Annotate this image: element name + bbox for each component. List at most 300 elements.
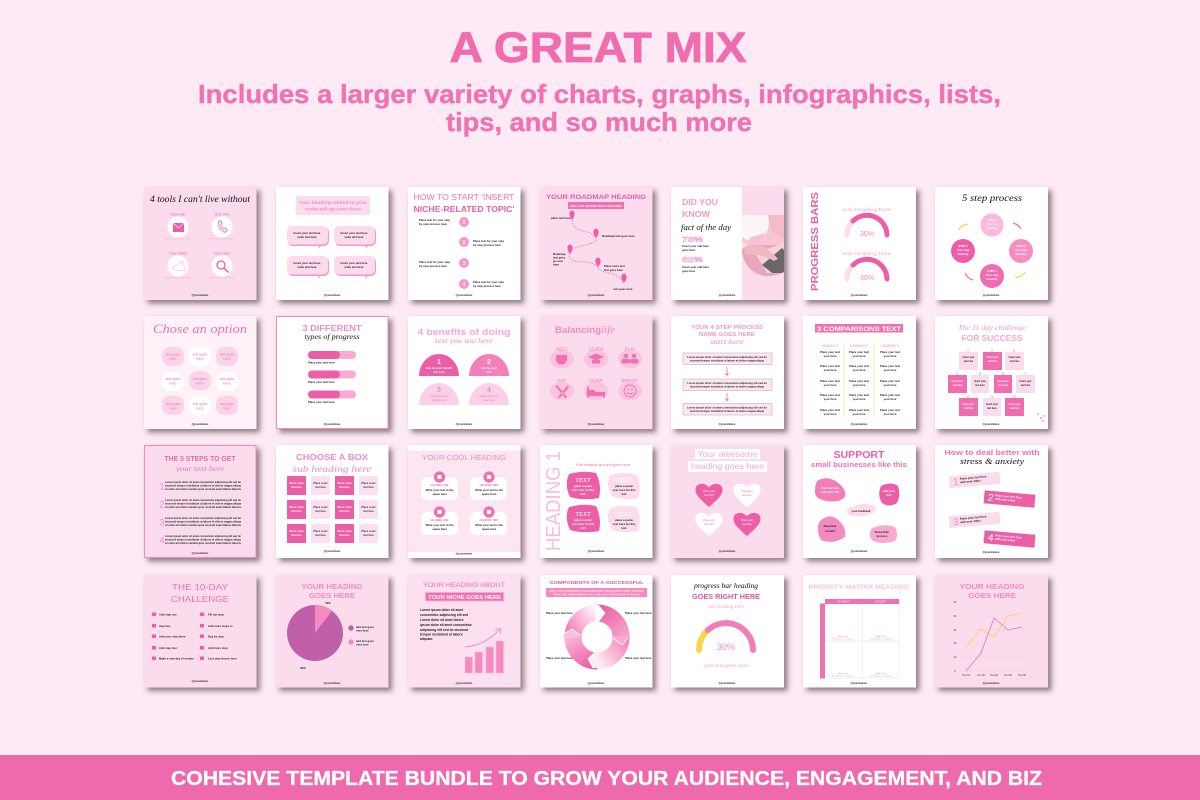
panel: roadmap: Place more text bbox=[604, 264, 625, 268]
process box 2 bbox=[683, 379, 772, 390]
panel: how to start: 2 bbox=[463, 240, 466, 246]
panel: 10-day challenge: Add your step three bbox=[159, 634, 186, 638]
icons bbox=[556, 354, 638, 398]
panel: line chart: @yoursitehere bbox=[983, 682, 1000, 685]
panel: roadmap: Roadmap bbox=[553, 252, 566, 256]
panel: components ring: Place your text here bbox=[546, 656, 573, 660]
panel: heading 1: place a quote bbox=[574, 518, 592, 522]
panel: heading 1: TEXT bbox=[616, 477, 632, 484]
panel: 11 day challenge: 2 bbox=[991, 348, 994, 352]
panel: step process: heading bbox=[987, 277, 998, 281]
line chart: Text 02 bbox=[977, 674, 986, 677]
strip 2 bbox=[984, 490, 1035, 508]
panel: choose a box: Place some bbox=[337, 505, 352, 509]
comparison rows: Place your text bbox=[880, 364, 900, 368]
step text: ut enim ad minim veniam quis nostrud exercitation laboris bbox=[165, 505, 241, 509]
progress bar 3: Place your text here bbox=[308, 400, 335, 404]
arrows bbox=[959, 223, 1025, 280]
process box 1: Lorem ipsum dolor sit amet consectetur adipiscing elit sed do bbox=[687, 355, 767, 359]
panel: 4 benefits: 4 bbox=[487, 387, 491, 394]
matrix: MY RIGHT bbox=[837, 600, 850, 604]
panel: did you know: fact of the day bbox=[681, 223, 731, 232]
panel: progress bar heading: progress bar heading bbox=[693, 581, 758, 590]
panel: hearts: Place your bbox=[741, 490, 753, 493]
comparison rows: Place your text bbox=[880, 393, 900, 397]
step text: ut enim ad minim veniam quis nostrud exercitation laboris bbox=[165, 541, 241, 545]
strip 1: with your steps bbox=[959, 478, 981, 484]
gauge bbox=[699, 623, 753, 650]
strip 4: Place your text here bbox=[995, 533, 1022, 540]
comparison rows bbox=[820, 350, 900, 416]
process box 2: eiusmod tempor incididunt ut labore et dolore magna aliqua bbox=[690, 384, 764, 388]
icon: megaphone bbox=[168, 256, 188, 276]
panel: choose a box: Place some bbox=[289, 505, 304, 509]
panel: pie chart: 90% bbox=[300, 666, 306, 670]
ring diagram bbox=[573, 613, 621, 661]
decoration: dots bbox=[1037, 413, 1045, 422]
comparison rows: your here bbox=[824, 354, 837, 358]
comparison rows: your here bbox=[824, 412, 837, 416]
comparison rows: your here bbox=[884, 397, 897, 401]
panel: hearts bbox=[671, 445, 784, 558]
panel: how to start: HOW TO START 'INSERT bbox=[414, 193, 515, 202]
panel: heading 1: @yoursitehere bbox=[588, 550, 605, 553]
comparison rows: Place your text bbox=[820, 408, 840, 412]
panel: priority matrix: PRIORITY MATRIX HEADING bbox=[808, 585, 910, 591]
panel: how to start: 4 bbox=[463, 282, 466, 288]
panel: balancing life: REST bbox=[556, 346, 568, 352]
bubble 2: Insert your text here bbox=[341, 231, 368, 235]
comparison rows: Place your text bbox=[820, 379, 840, 383]
panel: choose a box: text here bbox=[291, 485, 302, 489]
panel: pie chart: @yoursitehere bbox=[324, 682, 341, 685]
blobs bbox=[567, 472, 640, 532]
panel: choose a box: text here bbox=[291, 509, 302, 513]
panel: 10-day challenge: @yoursitehere bbox=[192, 680, 209, 683]
panel: pie chart: GOES HERE bbox=[309, 591, 355, 600]
panel: 10-day challenge: Add more steps to bbox=[208, 624, 233, 628]
panel: balancing life: PLAY bbox=[625, 346, 635, 352]
comparison rows: Place your text bbox=[820, 393, 840, 397]
panel: 11 day challenge: Insert your bbox=[1009, 356, 1021, 359]
panel: choose a box: text here bbox=[315, 509, 326, 513]
step text: eiusmod tempor incididunt ut labore et dolore magna aliqua bbox=[165, 520, 241, 524]
panel: 10-day challenge: Add step four bbox=[159, 646, 178, 650]
panel: 4 benefits: text here your bbox=[430, 394, 448, 398]
panel: comparisons: @yoursitehere bbox=[851, 423, 868, 426]
panel: 10-day challenge: Last step lesson here bbox=[208, 656, 237, 660]
comparison rows: Place your text bbox=[820, 350, 840, 354]
panel: 5 steps: 4 bbox=[159, 536, 165, 546]
panel: how to start: NICHE-RELATED TOPIC' bbox=[414, 205, 515, 214]
panel: comparisons: HEADING 1 bbox=[821, 344, 839, 348]
panel: 5 steps: @yoursitehere bbox=[192, 552, 209, 555]
line chart: 40 bbox=[954, 629, 957, 632]
panel: step process: Your step bbox=[957, 248, 970, 252]
panel: components ring: ADD A LITTLE SUBHEADING TO DESCRIBE WHAT THIS DIAGRAM IS ABOUT AND THEN bbox=[550, 590, 644, 593]
process box 1: eiusmod tempor incididunt ut labore et dolore magna aliqua bbox=[690, 358, 764, 362]
panel: components ring: Place your text here bbox=[625, 656, 652, 660]
panel: heading 1: TEXT bbox=[616, 511, 632, 518]
panel: types of progress: @yoursitehere bbox=[324, 423, 341, 426]
panel: 11 day challenge: Insert your bbox=[952, 380, 964, 383]
panel: line chart: GOES HERE bbox=[968, 591, 1016, 600]
panel: hearts: text here bbox=[704, 523, 714, 526]
panel: 11 day challenge: 3 bbox=[1013, 348, 1016, 352]
strip 4: with your steps bbox=[994, 537, 1016, 543]
line chart: Text 04 bbox=[1004, 674, 1013, 677]
comparison rows: your here bbox=[824, 383, 837, 387]
panel: support: Know their bbox=[875, 530, 890, 534]
panel: 4 tools: write your text here bbox=[164, 276, 191, 280]
panel: cool heading: Write your text in the bbox=[426, 523, 454, 527]
panel: heading 1: text bbox=[622, 492, 627, 496]
panel: step process: Your step bbox=[986, 273, 999, 277]
comparison rows: your here bbox=[853, 383, 866, 387]
panel: heading 1: text bbox=[581, 492, 586, 496]
panel: support: process bbox=[877, 534, 888, 538]
comparison rows: Place your text bbox=[820, 364, 840, 368]
panel: step process: STEP 3 bbox=[987, 269, 997, 273]
panel: progress bar heading: @yoursitehere bbox=[719, 682, 736, 685]
panel: how to start: Place text for your step bbox=[473, 280, 504, 284]
panel: 5 steps: 1 bbox=[159, 482, 165, 492]
legend bbox=[348, 625, 374, 646]
strip 3: Place your text here bbox=[960, 514, 987, 521]
panel: 11 day challenge: Insert your bbox=[997, 380, 1009, 383]
pie chart bbox=[287, 605, 343, 661]
panel: roadmap: text goes bbox=[553, 256, 566, 260]
panel: choose a box: Place some bbox=[337, 481, 352, 485]
panel: comparisons: 3 COMPARISONS TEXT bbox=[817, 326, 901, 333]
panel: 4 tools: write your text here bbox=[164, 236, 191, 240]
panel: did you know: 78% bbox=[682, 235, 703, 244]
panel: did you know: goes here bbox=[682, 269, 696, 273]
blobs bbox=[815, 478, 899, 543]
panel: support: write here the bbox=[820, 490, 840, 494]
panel: cool heading: HEADING TWO bbox=[480, 518, 498, 522]
comparison rows: Place your text bbox=[849, 350, 869, 354]
option blobs bbox=[162, 347, 238, 415]
comparison rows: your here bbox=[853, 354, 866, 358]
panel: choose a box: Place some bbox=[361, 481, 376, 485]
panel: pie chart bbox=[276, 575, 388, 688]
panel: choose a box: Place some bbox=[313, 481, 328, 485]
arrow bbox=[726, 392, 728, 401]
panel: progress bars: PROGRESS BARS bbox=[810, 192, 821, 291]
panel: 11 day challenge: text here bbox=[988, 360, 998, 363]
panel: roadmap: go over bbox=[553, 259, 564, 263]
line chart bbox=[954, 601, 1030, 677]
panel: choose a box: text here bbox=[339, 509, 350, 513]
bubble 1: Insert your text here bbox=[294, 231, 321, 235]
panel: priority matrix bbox=[803, 575, 916, 688]
panel: did you know: goes here bbox=[682, 248, 696, 252]
line chart: 60 bbox=[954, 601, 957, 604]
panel: 4 tools: 4 tools I can't live without bbox=[150, 194, 251, 204]
panel: cool heading: @yoursitehere bbox=[456, 552, 473, 556]
panel: how to start bbox=[408, 187, 520, 300]
panel: line chart: YOUR HEADING bbox=[960, 582, 1025, 591]
line chart: 50 bbox=[954, 615, 957, 618]
panel: support: Need that bbox=[824, 524, 836, 528]
panel: choose a box: text here bbox=[315, 533, 326, 537]
panel: 4 benefits: Can be your bbox=[481, 366, 498, 370]
panel: heading 1: place a quote bbox=[574, 484, 592, 488]
panel: 5 steps: THE 5 STEPS TO GET bbox=[164, 456, 236, 463]
legend: add text goes bbox=[356, 639, 374, 643]
bubble 3: write text here bbox=[297, 265, 317, 269]
step text: Lorem ipsum dolor sit amet consectetur adipiscing elit sed do bbox=[165, 534, 241, 538]
panel: support: @yoursitehere bbox=[851, 550, 868, 553]
panel: choose a box: text here bbox=[339, 485, 350, 489]
panel: choose an option: @yoursitehere bbox=[192, 423, 209, 426]
strip 2: 2 bbox=[988, 493, 994, 504]
panel: progress bar heading: GOES RIGHT HERE bbox=[692, 594, 760, 601]
panel: choose an option: text goes bbox=[166, 352, 180, 356]
panel: hearts: Place your bbox=[703, 490, 715, 493]
subtitle bbox=[198, 79, 1001, 137]
panel: choose an option: here bbox=[196, 406, 204, 410]
panel: 11 day challenge: text here bbox=[964, 407, 974, 410]
bubble 3 bbox=[287, 256, 329, 279]
icon: envelope bbox=[168, 216, 188, 238]
panel: 11 day challenge: text here bbox=[1010, 360, 1020, 363]
panel: roadmap: text goes here bbox=[604, 268, 623, 272]
panel: balancing life: BREATH bbox=[622, 378, 638, 383]
comparison rows: Place your text bbox=[849, 408, 869, 412]
panel: 10-day challenge: Add more step bbox=[208, 646, 228, 650]
comparison rows: Place your text bbox=[849, 364, 869, 368]
paragraph: tempor incididunt ut labore bbox=[420, 632, 463, 636]
panel: 10-day challenge: Add step one bbox=[159, 612, 177, 616]
line chart: 20 bbox=[954, 656, 957, 659]
panel: support: Your text and bbox=[821, 486, 839, 490]
gauge 2 bbox=[847, 259, 887, 279]
matrix: Add a box bbox=[838, 672, 849, 675]
panel: hearts: heading goes here bbox=[691, 462, 765, 471]
panel: progress bars: 30% bbox=[860, 231, 874, 238]
panel: progress bars: 30% bbox=[860, 275, 874, 282]
panel: step process: heading bbox=[958, 252, 969, 256]
panel: step process: @yoursitehere bbox=[983, 294, 1000, 297]
strip 3 bbox=[949, 512, 1000, 529]
panel: speech bubbles: Your heading related to your bbox=[299, 200, 367, 205]
panel: heading 1: place a quote bbox=[615, 484, 633, 488]
panel: choose a box: text here bbox=[363, 485, 374, 489]
matrix: Add a box bbox=[838, 635, 849, 638]
panel: support: your feedback bbox=[852, 509, 871, 513]
progress bar 2: Place your text here bbox=[308, 380, 335, 384]
line chart: Text 03 bbox=[990, 674, 999, 677]
panel: 4 benefits: 2 bbox=[487, 359, 491, 366]
panel: 11 day challenge: 10 bbox=[1012, 394, 1017, 399]
panel: choose an option: text goes bbox=[193, 377, 207, 381]
panel: 11 day challenge: text here bbox=[1021, 384, 1031, 387]
panel: balancing life: Balancing bbox=[555, 325, 601, 336]
panel: types of progress bbox=[276, 316, 388, 428]
panel: comparisons: HEADING 3 bbox=[881, 344, 899, 348]
comparison rows: your here bbox=[824, 368, 837, 372]
panel: roadmap: Roadmap text goes here bbox=[602, 234, 635, 238]
panel: balancing life: @yoursitehere bbox=[588, 423, 605, 426]
panel: 4 benefits: Helps with your bbox=[479, 394, 499, 398]
line chart: 30 bbox=[954, 642, 957, 645]
panel: cool heading: space here bbox=[482, 492, 497, 496]
strip 1: Place your text here bbox=[960, 474, 987, 481]
comparison rows: Place your text bbox=[880, 379, 900, 383]
panel: 4 tools: write your text here bbox=[208, 236, 235, 240]
panel: heading 1: TEXT bbox=[575, 511, 591, 518]
panel: support: Add your bbox=[883, 489, 896, 493]
panel: heading 1: place a quote bbox=[615, 518, 633, 522]
panel: support: content bbox=[825, 529, 835, 533]
panel: step process: STEP 1 bbox=[987, 218, 997, 222]
panel: pie chart: 10% bbox=[325, 601, 331, 605]
panel: 11 day challenge: 4 bbox=[956, 371, 959, 376]
panel: step process: 5 step process bbox=[962, 193, 1023, 203]
footer band bbox=[0, 755, 1200, 800]
panel: roadmap: text goes here bbox=[614, 287, 633, 291]
panel: 11 day challenge: 7 bbox=[1024, 371, 1027, 376]
matrix: description or response bbox=[832, 638, 855, 640]
panel: support: small businesses like this bbox=[811, 462, 907, 469]
bubble 2 bbox=[334, 226, 376, 249]
paragraph: Lorem ipsum dolor sit amet bbox=[420, 608, 464, 612]
panel: 11 day challenge: Insert your bbox=[963, 356, 975, 359]
panel: 4 tools: TOOL THREE bbox=[169, 252, 187, 256]
process box 1 bbox=[683, 353, 772, 364]
process box 2: Lorem ipsum dolor sit amet consectetur adipiscing elit sed do bbox=[687, 381, 767, 385]
panel: progress bars: sub heading here bbox=[842, 251, 892, 257]
panel: 11 day challenge bbox=[935, 316, 1048, 429]
hearts bbox=[695, 484, 761, 536]
comparison rows: Place your text bbox=[849, 393, 869, 397]
arrow bbox=[726, 367, 728, 376]
comparison rows: your here bbox=[884, 412, 897, 416]
panel: choose an option: here bbox=[196, 357, 204, 361]
process box 3 bbox=[683, 404, 772, 415]
panel: choose an option: text goes bbox=[220, 402, 234, 406]
panel: did you know: KNOW bbox=[682, 209, 711, 219]
matrix: description or response bbox=[870, 674, 893, 678]
line chart: 0 bbox=[954, 670, 956, 673]
panel: comparisons: HEADING 2 bbox=[850, 344, 868, 348]
comparison rows: your here bbox=[853, 397, 866, 401]
panel: choose an option: here bbox=[223, 382, 231, 386]
strip 1: 1 bbox=[953, 477, 960, 488]
panel: 11 day challenge: 9 bbox=[991, 394, 994, 399]
progress bar 1: Place your text here bbox=[308, 360, 335, 364]
panel: how to start: Place text for your step bbox=[473, 239, 504, 243]
panel: choose a box: text here bbox=[363, 509, 374, 513]
paragraph: consectetur adipiscing elit sed bbox=[420, 613, 468, 617]
step text: ut enim ad minim veniam quis nostrud exercitation laboris bbox=[165, 487, 241, 491]
step circles bbox=[951, 214, 1033, 288]
panel: pie chart: YOUR HEADING bbox=[302, 582, 363, 591]
panel: 11 day challenge: The 11 day challenge bbox=[958, 323, 1027, 332]
strip 3: with your steps bbox=[959, 518, 981, 524]
step text: eiusmod tempor incididunt ut labore et dolore magna aliqua bbox=[165, 502, 241, 506]
step text: ut enim ad minim veniam quis nostrud exercitation laboris bbox=[165, 523, 241, 527]
panel: heading 1: over here for this bbox=[613, 488, 636, 492]
panel: choose an option: here bbox=[169, 382, 177, 386]
panel: step process: STEP 2 bbox=[1016, 244, 1026, 248]
panel: choose an option bbox=[144, 316, 256, 429]
panel: niche bar chart: @yoursitehere bbox=[456, 682, 473, 685]
panel: 11 day challenge: 8 bbox=[967, 394, 970, 399]
panel: cool heading: space here bbox=[432, 492, 447, 496]
box grid bbox=[287, 476, 378, 543]
footer band: COHESIVE TEMPLATE BUNDLE TO GROW YOUR AUDIENCE, ENGAGEMENT, AND BIZ bbox=[171, 768, 1042, 790]
panel: how to start: @yoursitehere bbox=[456, 294, 473, 297]
paragraph: ipsum dolor sit amet consectetur bbox=[420, 623, 473, 627]
panel: choose a box: Place some bbox=[361, 505, 376, 509]
panel: choose a box: Place some bbox=[313, 529, 328, 533]
panel: choose a box: text here bbox=[339, 533, 350, 537]
panel: support: SUPPORT bbox=[834, 450, 884, 461]
panel: 4-step process: @yoursitehere bbox=[719, 423, 736, 426]
strip 4 bbox=[984, 530, 1035, 548]
panel: choose an option: here bbox=[169, 357, 177, 361]
photo: laptop bbox=[742, 215, 784, 277]
panel: cool heading: HEADING TWO bbox=[480, 483, 498, 487]
panel: choose an option: text goes bbox=[193, 352, 207, 356]
growth arrow bbox=[465, 629, 500, 647]
panel: cool heading: space here bbox=[482, 527, 497, 531]
comparison rows: Place your text bbox=[880, 408, 900, 412]
panel: choose an option: text goes bbox=[193, 402, 207, 406]
panel: hearts: Place your bbox=[703, 519, 715, 522]
panel: how to start: by step process here bbox=[473, 243, 501, 247]
panel: 11 day challenge: FOR SUCCESS bbox=[962, 333, 1023, 343]
bubble 2: write text here bbox=[344, 235, 364, 239]
panel: progress bar heading: sub heading here bbox=[708, 604, 745, 609]
panel: heading 1: HEADING 1 bbox=[543, 451, 565, 551]
panel: 4-step process bbox=[671, 316, 784, 429]
bubble 4: write text here bbox=[344, 265, 364, 269]
panel: stress and anxiety: stress & anxiety bbox=[960, 457, 1025, 466]
icon: magnifier bbox=[212, 256, 232, 276]
panel: how to start: 1 bbox=[463, 220, 466, 226]
panel: roadmap: @yoursitehere bbox=[588, 294, 605, 297]
paragraph: adipiscing elit sed do eiusmod bbox=[420, 628, 468, 632]
panel: 4 tools bbox=[144, 187, 256, 300]
panel: choose a box: text here bbox=[291, 533, 302, 537]
comparison rows: your here bbox=[884, 368, 897, 372]
comparison rows: your here bbox=[884, 354, 897, 358]
panel: 10-day challenge: CHALLENGE bbox=[171, 594, 229, 604]
panel: step process: heading bbox=[1016, 252, 1027, 256]
panel: hearts: Your awesome bbox=[698, 450, 758, 459]
bubble 1 bbox=[287, 226, 329, 249]
legend: over here bbox=[356, 642, 369, 646]
panel: choose a box: text here bbox=[315, 485, 326, 489]
step text: eiusmod tempor incididunt ut labore et dolore magna aliqua bbox=[165, 484, 241, 488]
panel: 4 benefits: step text bbox=[484, 398, 495, 402]
step text: Lorem ipsum dolor sit amet consectetur adipiscing elit sed do bbox=[165, 498, 241, 502]
strip 2: with your steps bbox=[994, 497, 1016, 503]
panel: 4 benefits: Can be your benefit bbox=[426, 366, 452, 370]
panel: 10-day challenge: Fill out step bbox=[208, 612, 224, 616]
panel: 4 benefits: 1 bbox=[437, 359, 441, 366]
panel: 10-day challenge: step two bbox=[159, 624, 171, 628]
panel: did you know: Insert your stat here bbox=[682, 265, 709, 269]
panel: progress bar heading: your text goes here bbox=[704, 663, 749, 668]
comparison rows: Place your text bbox=[880, 350, 900, 354]
panel: 4 benefits: 3 bbox=[437, 387, 441, 394]
panel: 4-step process: start here bbox=[710, 338, 744, 346]
